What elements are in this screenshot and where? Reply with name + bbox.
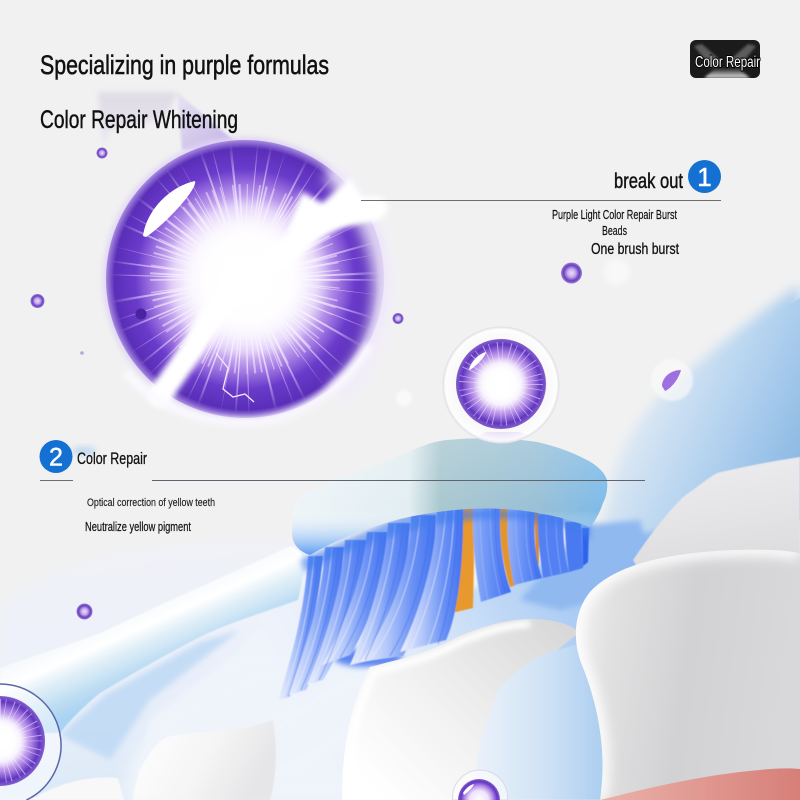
- foam: between teeth: [473, 645, 620, 800]
- bubble: [651, 359, 693, 401]
- bristle strands: light: [284, 508, 454, 696]
- white blur fragment: [396, 390, 412, 406]
- description line 2: Neutralize yellow pigment: [85, 520, 191, 534]
- number badge 1: [688, 160, 721, 193]
- divider line left: [40, 480, 73, 482]
- bead: [96, 148, 108, 158]
- bottom glass bead: [452, 770, 508, 800]
- moon: [662, 370, 681, 391]
- circle: [688, 160, 721, 193]
- digit: 2: [49, 444, 63, 472]
- bristle strands: fine right: [480, 508, 561, 600]
- badge bottom fade: [704, 68, 750, 78]
- glass ring: [0, 684, 61, 800]
- bead right-side fade: [330, 170, 383, 395]
- description line 1: Optical correction of yellow teeth: [87, 497, 215, 509]
- tiny speck: [80, 351, 84, 355]
- bead on foam left: [76, 604, 92, 620]
- circle: [40, 440, 72, 473]
- contact shadow: [478, 432, 528, 443]
- bristle strands: dark: [288, 508, 538, 696]
- bead outer halo: [103, 137, 387, 421]
- glass bubble bead on brush head: [442, 326, 560, 444]
- number badge 2: [40, 440, 96, 473]
- purple light tails: [98, 92, 240, 150]
- orange bristles: [447, 505, 539, 614]
- tooth: middle: [342, 619, 580, 800]
- inner bead: [0, 696, 45, 786]
- badge: Color Repair: [690, 40, 760, 78]
- toothbrush head: [292, 438, 607, 555]
- inner bead highlight: [469, 352, 486, 370]
- description line 1: Purple Light Color Repair Burst: [552, 207, 677, 222]
- bottom-left glass bead: [0, 684, 61, 800]
- large purple burst bead: [98, 92, 387, 422]
- toothbrush bristles: [278, 505, 590, 700]
- half-moon bead on foam: [651, 359, 693, 401]
- foam: left soft cloud: [0, 540, 430, 800]
- badge body: [690, 40, 760, 78]
- blue smear: [72, 446, 96, 456]
- foam: upper right: [596, 285, 800, 640]
- inner dark droplet: [136, 308, 146, 320]
- small lightning arc: [216, 353, 254, 402]
- tooth: back right: [633, 457, 800, 590]
- heading: Color Repair: [77, 449, 147, 468]
- toothbrush head shading: [292, 438, 607, 555]
- badge text: Color Repair: [695, 54, 760, 71]
- inner bead center glow: [473, 356, 529, 412]
- blue tip glow: [334, 649, 402, 667]
- divider line: [361, 200, 721, 202]
- description line 2: Beads: [602, 223, 627, 238]
- title: Specializing in purple formulas: [40, 50, 329, 80]
- foam: pale lower bubble: [120, 665, 400, 800]
- bead light rays: [165, 199, 325, 359]
- callout 2: Color Repair: [40, 440, 645, 534]
- divider line right: [152, 480, 645, 482]
- foam: bristle tips: [262, 668, 385, 785]
- tooth: large right: [576, 550, 800, 800]
- inner bead: [456, 339, 546, 429]
- bead left: [30, 294, 44, 308]
- gum: [600, 768, 800, 800]
- glass fill: [0, 684, 61, 800]
- bead under text: [561, 262, 582, 284]
- badge sheen right: [730, 44, 756, 68]
- tooth: middle rim light: [371, 620, 532, 678]
- digit: 1: [697, 162, 712, 192]
- bead right of sphere: [392, 313, 404, 324]
- foam: shade below handle: [60, 630, 240, 760]
- bristle base shadow: [300, 508, 590, 572]
- lightning peak: [285, 178, 378, 252]
- floating small beads: [30, 148, 693, 620]
- inner rays: [0, 715, 26, 767]
- glossy highlight: [143, 181, 195, 237]
- lightning band: [160, 208, 375, 395]
- foam: lower backing: [0, 690, 420, 800]
- glass ring: [452, 770, 508, 800]
- callout 1: break out: [361, 160, 721, 258]
- description line 3: One brush burst: [591, 241, 679, 258]
- white blur bubble: [604, 259, 630, 285]
- foam: blue shadow right of bristles: [520, 520, 650, 610]
- subtitle: Color Repair Whitening: [40, 106, 238, 134]
- tooth: left small: [133, 720, 276, 800]
- bead body: [106, 140, 384, 418]
- foam: under bristles: [130, 530, 660, 800]
- inner bead: [458, 779, 500, 800]
- tooth: small left corner: [30, 777, 124, 800]
- illustration: foam, teeth and toothbrush: [0, 285, 800, 800]
- glass shell: [442, 326, 560, 444]
- inner highlight: [463, 784, 474, 795]
- inner bead rays: [475, 358, 527, 410]
- badge sheen left: [694, 44, 720, 68]
- inner glow: [0, 713, 28, 769]
- bead center glow: [164, 196, 332, 360]
- tooth: large rim light: [576, 550, 800, 800]
- foam: upper right backing: [620, 298, 800, 620]
- heading: break out: [614, 170, 683, 193]
- lower rim glow: [125, 345, 370, 422]
- toothbrush handle: [0, 546, 305, 733]
